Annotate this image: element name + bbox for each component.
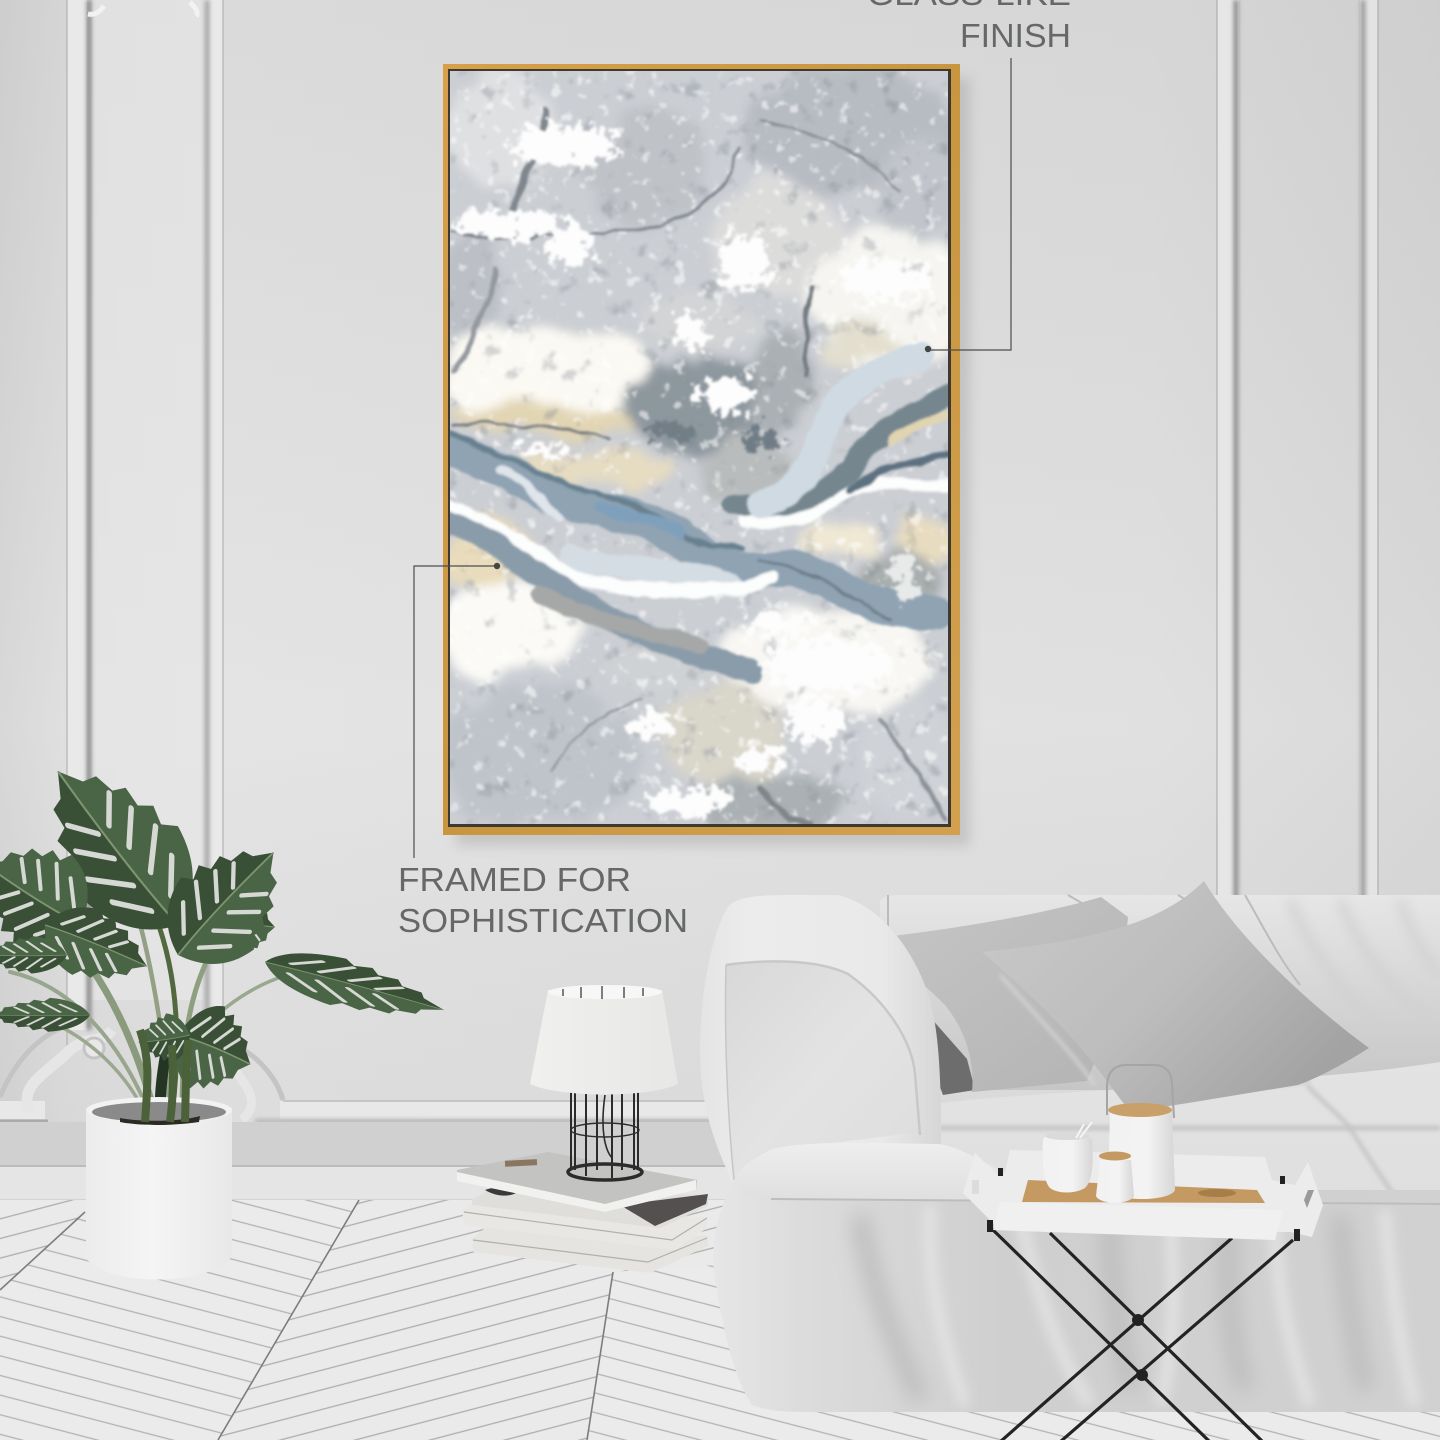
table lamp: [530, 985, 678, 1180]
callout: glass-like finish: FINISH: [960, 17, 1071, 54]
callout: glass-like finish: [867, 0, 1071, 352]
table legs: [990, 1227, 1293, 1440]
lamp cage: [568, 1092, 642, 1180]
callout: framed for sophistication: [398, 563, 688, 939]
lower wainscot moulding: [0, 1025, 740, 1121]
marble painting: [450, 71, 948, 824]
lamp shade: [530, 990, 678, 1094]
black clips: [987, 1168, 1300, 1241]
sofa: [700, 881, 1440, 1412]
sofa arm: [700, 895, 941, 1183]
tray table: [963, 1065, 1323, 1440]
floor: [0, 1200, 1440, 1440]
callout: framed for sophistication: SOPHISTICATION: [398, 902, 688, 939]
small jar: [1096, 1160, 1134, 1203]
fine marble speckle: [450, 71, 948, 824]
cushion: rear grey: [867, 897, 1128, 1092]
framed artwork: [430, 60, 975, 846]
plant stems: [10, 890, 320, 1115]
sofa lower body: [713, 1183, 1440, 1412]
marble veins and river bands: [445, 110, 952, 824]
tray front: [993, 1202, 1283, 1240]
leaves: [214, 895, 276, 958]
skirting: [0, 1165, 740, 1201]
plant: [0, 734, 450, 1115]
gold frame: [443, 64, 960, 835]
large jar: [1108, 1112, 1175, 1199]
dark gap: [915, 1000, 975, 1095]
ceramic mug: [1043, 1133, 1093, 1192]
glass handle: [1107, 1065, 1174, 1118]
white flakes: [455, 125, 930, 814]
books stack: [457, 1152, 708, 1273]
tray: [963, 1150, 1323, 1237]
cushion: front grey: [982, 881, 1369, 1112]
planter pot: [86, 1030, 232, 1280]
sofa back cushions: [880, 895, 1440, 1090]
callout: framed for sophistication: FRAMED FOR: [398, 861, 631, 898]
wall mouldings: [0, 0, 1378, 1201]
tray wood insert: [1022, 1180, 1265, 1203]
seat cushions: [935, 1062, 1440, 1230]
sofa front roll: [733, 1143, 1440, 1205]
